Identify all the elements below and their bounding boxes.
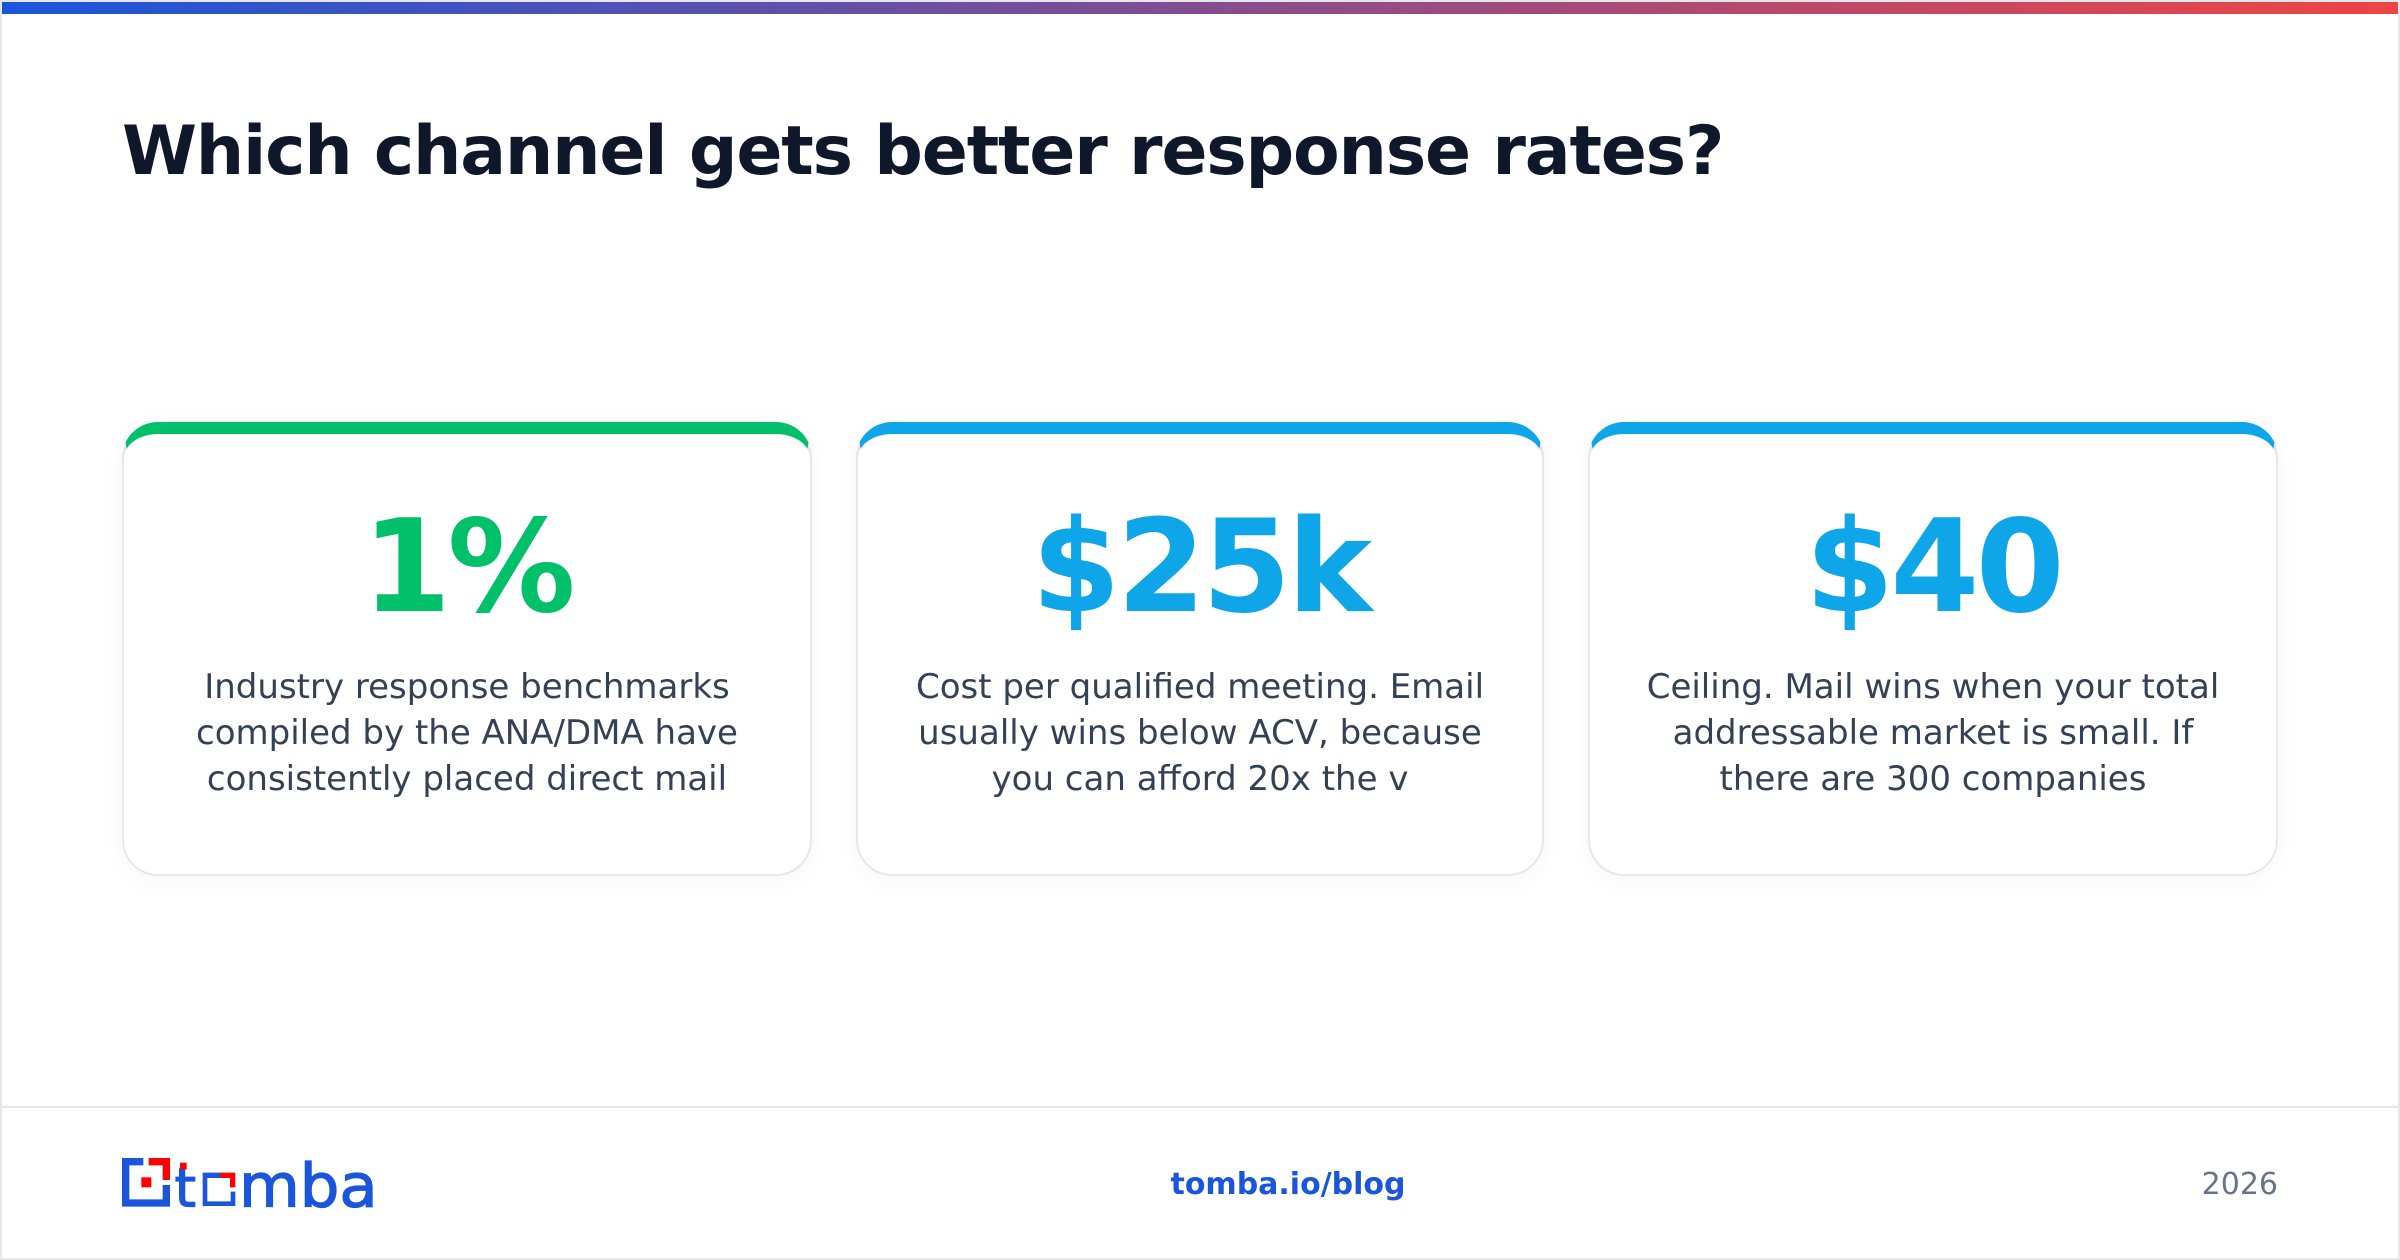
footer year: 2026 bbox=[2202, 1167, 2278, 1202]
description: cost per meeting: Cost per qualified meeting. Email bbox=[916, 667, 1484, 707]
description: ceiling: addressable market is small. If bbox=[1673, 713, 2193, 753]
description: ceiling bbox=[1647, 667, 2219, 799]
description: cost per meeting bbox=[916, 667, 1484, 799]
icon: logo square o bbox=[203, 1173, 235, 1206]
icon: logo mark bbox=[122, 1158, 170, 1207]
logo letter t: t bbox=[175, 1156, 196, 1219]
description: response benchmarks bbox=[196, 667, 738, 799]
panel: 1% stat card bbox=[122, 422, 812, 876]
stat: $40: $40 bbox=[1805, 493, 2061, 642]
description: response benchmarks: consistently placed direct mail bbox=[207, 759, 727, 799]
top gradient bar bbox=[2, 2, 2398, 14]
stat: 1%: 1% bbox=[362, 493, 572, 642]
description: ceiling: Ceiling. Mail wins when your total bbox=[1647, 667, 2219, 707]
description: ceiling: there are 300 companies bbox=[1720, 759, 2146, 799]
icon: logo dot bbox=[180, 1163, 187, 1169]
panel: $25k stat card bbox=[856, 422, 1544, 876]
description: cost per meeting: usually wins below ACV, because bbox=[918, 713, 1482, 753]
description: response benchmarks: Industry response benchmarks bbox=[204, 667, 730, 707]
footer link: tomba.io/blog bbox=[1170, 1167, 1406, 1202]
description: response benchmarks: compiled by the ANA/DMA have bbox=[196, 713, 738, 753]
description: cost per meeting: you can afford 20x the v bbox=[992, 759, 1408, 799]
panel: $40 stat card bbox=[1588, 422, 2278, 876]
stat: $25k: $25k bbox=[1032, 493, 1368, 642]
title: Which channel gets better response rates? bbox=[122, 112, 1723, 191]
logo: tomba bbox=[122, 1151, 378, 1221]
logo letters mba: mba bbox=[239, 1151, 378, 1221]
